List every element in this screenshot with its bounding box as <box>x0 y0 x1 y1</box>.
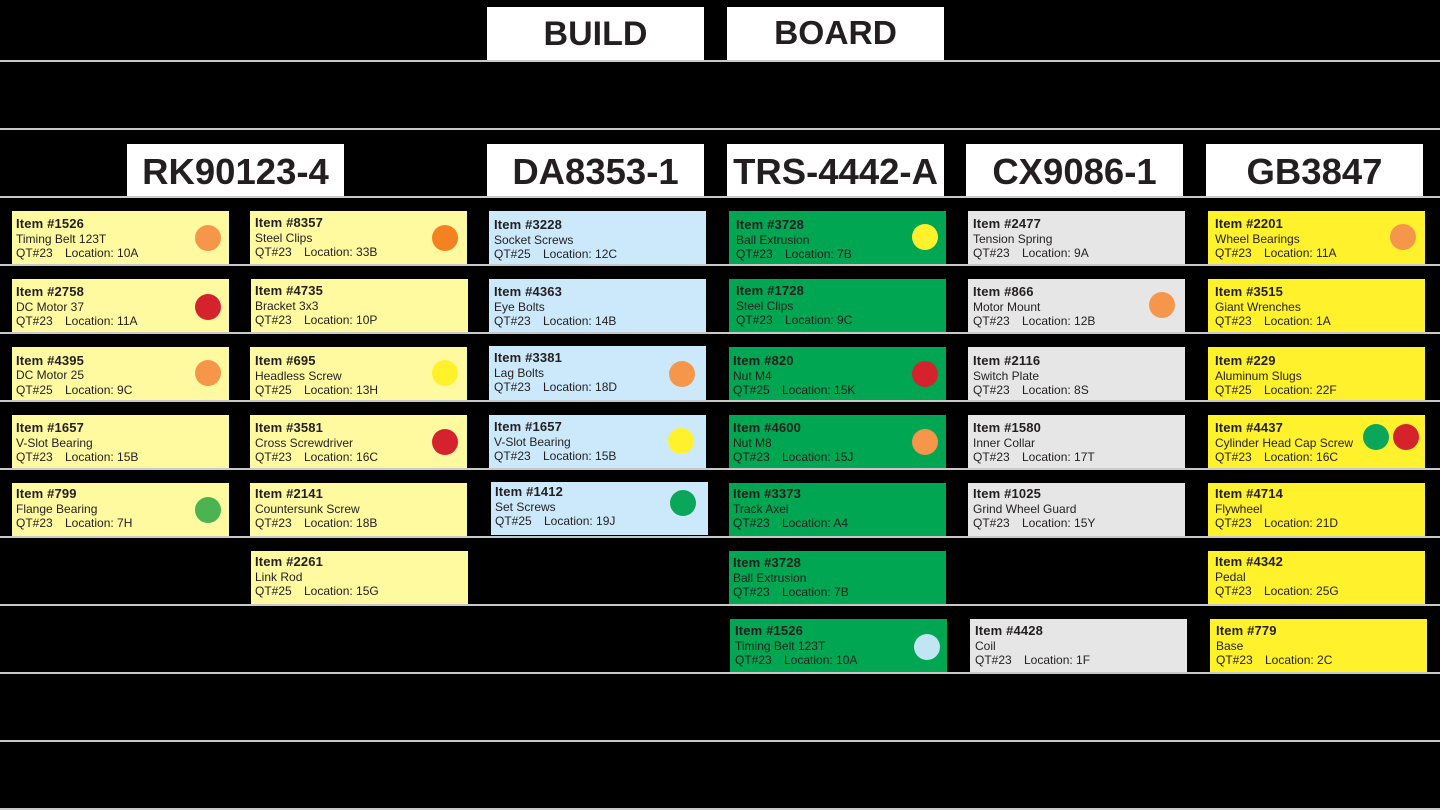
card: Item #779 <box>1210 619 1427 673</box>
column heading: DA8353-1 <box>487 144 704 198</box>
card: Item #2261: Link Rod <box>255 570 302 584</box>
card: Item #866: QT#23 <box>973 314 1010 328</box>
card: Item #695: Item #695 <box>255 353 316 368</box>
card: Item #4395: DC Motor 25 <box>16 368 84 382</box>
card: Item #820: QT#25 <box>733 383 770 397</box>
card: Item #4437: Cylinder Head Cap Screw <box>1215 436 1353 450</box>
card: Item #3581: QT#23 <box>255 450 292 464</box>
card: Item #779: Base <box>1216 638 1243 652</box>
card: Item #1412: Item #1412 <box>495 484 563 499</box>
title: BOARD <box>727 7 944 61</box>
status dot: orange <box>1390 224 1416 250</box>
status dot: orange <box>195 225 221 251</box>
card: Item #4428: Location: 1F <box>1024 653 1090 667</box>
card: Item #2116: Location: 8S <box>1022 383 1089 397</box>
card: Item #820: Nut M4 <box>733 368 772 382</box>
card: Item #4395: QT#25 <box>16 382 53 396</box>
card: Item #4342 <box>1208 551 1425 605</box>
card: Item #8357: Item #8357 <box>255 215 323 230</box>
card: Item #2758: Location: 11A <box>65 314 138 328</box>
card: Item #1728: Steel Clips <box>736 298 793 312</box>
column heading: RK90123-4 <box>127 144 344 198</box>
card: Item #1657: QT#23 <box>16 450 53 464</box>
card: Item #3381: QT#23 <box>494 380 531 394</box>
card: Item #1657: Item #1657 <box>494 419 562 434</box>
card: Item #2116: QT#23 <box>973 383 1010 397</box>
card: Item #2141: QT#23 <box>255 516 292 530</box>
card: Item #799: Flange Bearing <box>16 502 97 516</box>
card: Item #4428: Item #4428 <box>975 623 1043 638</box>
card: Item #4395: Item #4395 <box>16 352 84 368</box>
card: Item #3228: Location: 12C <box>543 247 617 261</box>
card: Item #3373: Item #3373 <box>733 486 801 501</box>
card: Item #3728: QT#23 <box>733 585 770 599</box>
card: Item #4600: QT#23 <box>733 450 770 464</box>
card: Item #2261: Item #2261 <box>255 554 323 569</box>
card: Item #866: Motor Mount <box>973 300 1040 314</box>
card: Item #1580: Inner Collar <box>973 436 1035 450</box>
status dot: green <box>195 497 221 523</box>
card: Item #4363: Eye Bolts <box>494 300 545 314</box>
card: Item #4342: QT#23 <box>1215 584 1252 598</box>
card: Item #4395: Location: 9C <box>65 382 132 396</box>
card: Item #2201: QT#23 <box>1215 246 1252 260</box>
card: Item #1412 <box>491 482 708 535</box>
card: Item #1728: Location: 9C <box>785 313 852 327</box>
card: Item #1526: QT#23 <box>735 653 772 667</box>
card: Item #779: QT#23 <box>1216 653 1253 667</box>
card: Item #4428: QT#23 <box>975 653 1012 667</box>
card: Item #2141: Countersunk Screw <box>255 502 360 516</box>
card: Item #4428: Coil <box>975 638 996 652</box>
card: Item #3728 <box>729 551 946 605</box>
card: Item #8357: QT#23 <box>255 245 292 259</box>
status dot: yellow <box>432 360 458 386</box>
card: Item #3728: Location: 7B <box>785 247 852 261</box>
card: Item #229: Aluminum Slugs <box>1215 368 1302 382</box>
card: Item #2477 <box>968 211 1185 265</box>
status dot: orange <box>912 429 938 455</box>
status dot: orange <box>432 225 458 251</box>
card: Item #3228: Socket Screws <box>494 232 573 246</box>
card: Item #4363: Location: 14B <box>543 314 616 328</box>
card: Item #229: Item #229 <box>1215 353 1276 368</box>
card: Item #4735 <box>251 279 468 333</box>
card: Item #4735: QT#23 <box>255 313 292 327</box>
card: Item #799: Item #799 <box>16 486 77 501</box>
card: Item #4600: Location: 15J <box>782 450 853 464</box>
status dot: orange <box>195 360 221 386</box>
card: Item #4437: Item #4437 <box>1215 420 1283 435</box>
card: Item #3381: Location: 18D <box>543 380 617 394</box>
card: Item #229 <box>1208 347 1425 401</box>
card: Item #3515: Giant Wrenches <box>1215 300 1301 314</box>
card: Item #4437: Location: 16C <box>1264 450 1338 464</box>
card: Item #8357 <box>250 211 467 265</box>
card: Item #779: Item #779 <box>1216 623 1277 638</box>
card: Item #1412: QT#25 <box>495 514 532 528</box>
card: Item #3581: Cross Screwdriver <box>255 436 353 450</box>
card: Item #4342: Location: 25G <box>1264 584 1339 598</box>
card: Item #1728: Item #1728 <box>736 283 804 298</box>
card: Item #4735: Bracket 3x3 <box>255 298 318 312</box>
card: Item #1526: Timing Belt 123T <box>735 638 825 652</box>
card: Item #1580: Location: 17T <box>1022 450 1095 464</box>
card: Item #1526 <box>12 211 229 265</box>
card: Item #3728: Item #3728 <box>733 555 801 570</box>
card: Item #4714: Item #4714 <box>1215 486 1283 501</box>
card: Item #1728: QT#23 <box>736 313 773 327</box>
card: Item #3728: QT#23 <box>736 247 773 261</box>
card: Item #4714: Flywheel <box>1215 502 1262 516</box>
status dot: red <box>1393 424 1419 450</box>
card: Item #1728 <box>729 279 946 333</box>
card: Item #799: Location: 7H <box>65 516 132 530</box>
status dot: green <box>1363 424 1389 450</box>
status dot: yellow <box>912 224 938 250</box>
card: Item #3728: Item #3728 <box>736 217 804 232</box>
card: Item #3515: QT#23 <box>1215 314 1252 328</box>
card: Item #3373: Track Axel <box>733 502 789 516</box>
card: Item #3515: Location: 1A <box>1264 314 1331 328</box>
card: Item #695: Location: 13H <box>304 383 378 397</box>
card: Item #4428 <box>970 619 1187 673</box>
card: Item #4735: Location: 10P <box>304 313 377 327</box>
card: Item #2141: Location: 18B <box>304 516 377 530</box>
card: Item #1526: Item #1526 <box>735 623 803 638</box>
card: Item #3581: Item #3581 <box>255 420 323 435</box>
card: Item #2758 <box>12 279 229 333</box>
card: Item #4342: Item #4342 <box>1215 554 1283 569</box>
card: Item #4363: QT#23 <box>494 314 531 328</box>
status dot: green <box>670 490 696 516</box>
card: Item #2261: QT#25 <box>255 584 292 598</box>
card: Item #820 <box>729 347 946 401</box>
card: Item #1657 <box>489 415 706 469</box>
card: Item #1025 <box>968 483 1185 537</box>
card: Item #3228: Item #3228 <box>494 217 562 232</box>
column heading: GB3847: GB3847 <box>1247 151 1382 192</box>
title: BOARD: BOARD <box>774 15 897 52</box>
card: Item #799 <box>12 483 229 537</box>
card: Item #1657: QT#23 <box>494 449 531 463</box>
card: Item #3381 <box>489 346 706 401</box>
title: BUILD <box>487 7 704 61</box>
card: Item #820: Item #820 <box>733 353 794 368</box>
card: Item #866: Item #866 <box>973 284 1034 299</box>
card: Item #3381: Item #3381 <box>494 350 562 365</box>
card: Item #1526: Item #1526 <box>16 216 84 231</box>
card: Item #3381: Lag Bolts <box>494 366 544 380</box>
card: Item #866 <box>968 279 1185 333</box>
card: Item #1025: QT#23 <box>973 516 1010 530</box>
card: Item #2477: Tension Spring <box>973 232 1052 246</box>
card: Item #2116 <box>968 347 1185 401</box>
card: Item #3228: QT#25 <box>494 247 531 261</box>
card: Item #2141 <box>250 483 467 537</box>
card: Item #1412: Location: 19J <box>544 514 615 528</box>
card: Item #2141: Item #2141 <box>255 486 323 501</box>
card: Item #229: Location: 22F <box>1264 383 1337 397</box>
card: Item #695 <box>250 347 467 401</box>
status dot: orange <box>1149 292 1175 318</box>
card: Item #1657: Item #1657 <box>16 420 84 435</box>
card: Item #1657: V-Slot Bearing <box>494 434 571 448</box>
card: Item #3581: Location: 16C <box>304 450 378 464</box>
card: Item #695: Headless Screw <box>255 368 342 382</box>
card: Item #1526: Timing Belt 123T <box>16 232 106 246</box>
card: Item #2477: Item #2477 <box>973 216 1041 231</box>
card: Item #779: Location: 2C <box>1265 653 1332 667</box>
card: Item #3515: Item #3515 <box>1215 284 1283 299</box>
card: Item #2261: Location: 15G <box>304 584 379 598</box>
card: Item #3515 <box>1208 279 1425 333</box>
card: Item #799: QT#23 <box>16 516 53 530</box>
card: Item #2201: Wheel Bearings <box>1215 232 1300 246</box>
card: Item #1580 <box>968 415 1185 469</box>
card: Item #2758: Item #2758 <box>16 284 84 299</box>
column heading: TRS-4442-A: TRS-4442-A <box>733 151 938 192</box>
card: Item #1657: V-Slot Bearing <box>16 436 93 450</box>
card: Item #1025: Grind Wheel Guard <box>973 502 1076 516</box>
card: Item #4714: Location: 21D <box>1264 516 1338 530</box>
card: Item #4714: QT#23 <box>1215 516 1252 530</box>
card: Item #1025: Location: 15Y <box>1022 516 1095 530</box>
card: Item #4437 <box>1208 415 1425 469</box>
card: Item #8357: Steel Clips <box>255 230 312 244</box>
card: Item #2201: Item #2201 <box>1215 216 1283 231</box>
card: Item #4714 <box>1208 483 1425 537</box>
status dot: red <box>195 294 221 320</box>
status dot: red <box>912 361 938 387</box>
card: Item #2116: Item #2116 <box>973 353 1040 368</box>
column heading: RK90123-4: RK90123-4 <box>142 151 329 192</box>
card: Item #2116: Switch Plate <box>973 368 1039 382</box>
card: Item #1412: Set Screws <box>495 500 556 514</box>
card: Item #3728: Ball Extrusion <box>733 570 806 584</box>
card: Item #2261 <box>251 551 468 605</box>
card: Item #4363: Item #4363 <box>494 284 562 299</box>
card: Item #3581 <box>250 415 467 469</box>
card: Item #1526: QT#23 <box>16 246 53 260</box>
card: Item #4600: Item #4600 <box>733 420 801 435</box>
column heading: CX9086-1: CX9086-1 <box>992 151 1157 192</box>
card: Item #1526 <box>730 619 947 673</box>
card: Item #4342: Pedal <box>1215 570 1246 584</box>
card: Item #4600: Nut M8 <box>733 436 772 450</box>
card: Item #2758: QT#23 <box>16 314 53 328</box>
card: Item #1657 <box>12 415 229 469</box>
card: Item #1657: Location: 15B <box>543 449 616 463</box>
card: Item #820: Location: 15K <box>782 383 855 397</box>
card: Item #4437: QT#23 <box>1215 450 1252 464</box>
status dot: orange <box>669 361 695 387</box>
card: Item #3373: Location: A4 <box>782 516 848 530</box>
status dot: red <box>432 429 458 455</box>
card: Item #1025: Item #1025 <box>973 486 1041 501</box>
card: Item #4735: Item #4735 <box>255 283 323 298</box>
card: Item #3228 <box>489 211 706 265</box>
card: Item #229: QT#25 <box>1215 383 1252 397</box>
column heading: GB3847 <box>1206 144 1423 198</box>
card: Item #2477: Location: 9A <box>1022 246 1089 260</box>
card: Item #2758: DC Motor 37 <box>16 300 84 314</box>
card: Item #695: QT#25 <box>255 383 292 397</box>
column heading: CX9086-1 <box>966 144 1183 198</box>
card: Item #2477: QT#23 <box>973 246 1010 260</box>
card: Item #1580: QT#23 <box>973 450 1010 464</box>
card: Item #1657: Location: 15B <box>65 450 138 464</box>
card: Item #1526: Location: 10A <box>784 653 857 667</box>
card: Item #3728: Location: 7B <box>782 585 849 599</box>
card: Item #1526: Location: 10A <box>65 246 138 260</box>
card: Item #2201: Location: 11A <box>1264 246 1336 260</box>
card: Item #4395 <box>12 347 229 401</box>
status dot: yellow <box>668 428 694 454</box>
card: Item #3728: Ball Extrusion <box>736 232 809 246</box>
card: Item #4363 <box>489 279 706 333</box>
card: Item #2201 <box>1208 211 1425 265</box>
card: Item #3373: QT#23 <box>733 516 770 530</box>
title: BUILD: BUILD <box>544 15 647 53</box>
card: Item #3373 <box>729 483 946 537</box>
card: Item #8357: Location: 33B <box>304 245 377 259</box>
card: Item #3728 <box>729 211 946 265</box>
card: Item #866: Location: 12B <box>1022 314 1095 328</box>
card: Item #1580: Item #1580 <box>973 420 1041 435</box>
status dot: light blue <box>914 634 940 660</box>
card: Item #4600 <box>729 415 946 469</box>
column heading: DA8353-1: DA8353-1 <box>512 151 679 192</box>
